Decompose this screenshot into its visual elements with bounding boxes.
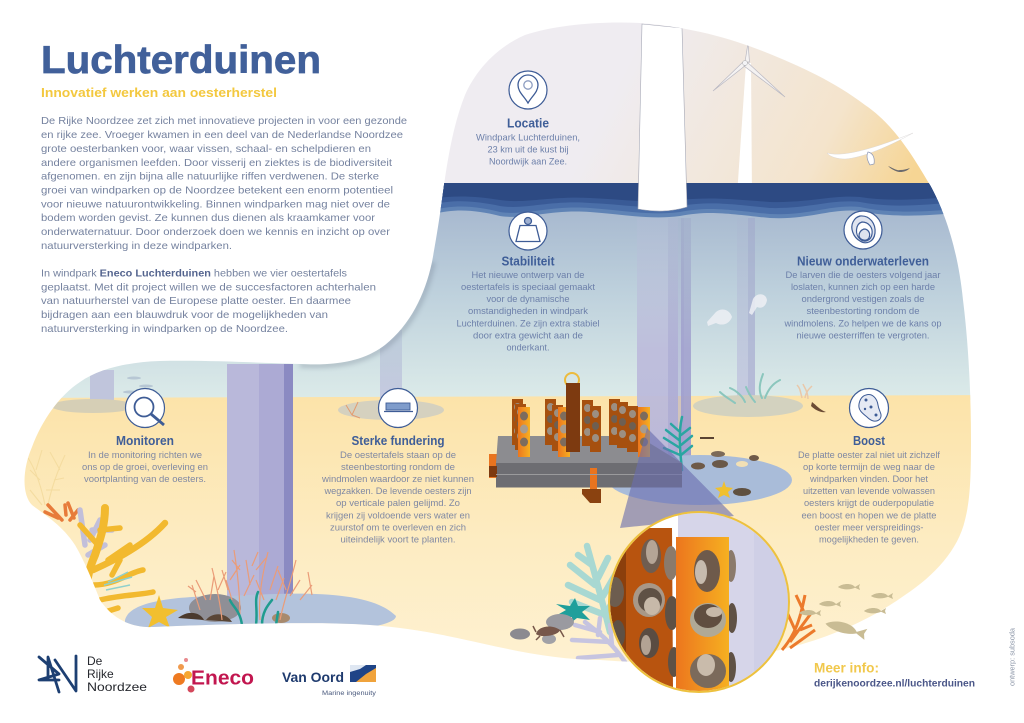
teal starfish [556,598,590,621]
text: mogelijkheden te geven. [819,534,919,544]
logo balls [173,658,194,692]
text: oestertafels is speciaal gemaakt [461,281,595,292]
text: steenbestorting rondom de [341,461,455,472]
text: 23 km uit de kust bij [488,144,568,154]
second paragraph: natuurversterking in windparken op de Noordzee. [41,323,288,335]
logo: De Rijke Noordzee: Rijke [87,667,114,681]
green seaweed [230,592,278,625]
bottom left rock bed [125,594,396,628]
far left rock bed [53,399,126,413]
intro paragraph: natuurversterking in deze windparken. [41,240,232,252]
text: voor de dynamische [486,293,570,304]
text: De platte oester zal niet uit zichzelf [798,449,940,460]
text: Windpark Luchterduinen, [476,132,580,142]
panel: Stabiliteit [456,212,600,352]
icon: foundation [378,388,418,428]
orange coral right [782,595,815,650]
text: krijgen zij voldoende vers water en [326,510,470,520]
text [476,132,580,166]
oyster right 2 [690,603,726,637]
logo wordmark: De [87,654,103,668]
middle rock bed with coral [338,400,444,420]
text: door extra gewicht aan de [473,330,583,340]
orange coral left [45,503,78,520]
oyster right 1 [694,550,720,592]
panel: Sterke fundering [321,388,474,544]
intro paragraph: De Rijke Noordzee zet zich met innovatieve projecten in voor een gezonde [41,115,407,127]
teal frond [664,417,692,470]
intro paragraph: en rijke zee. Vroeger kwamen in een deel van de Nederlandse Noordzee [41,129,403,141]
icon: oyster [850,388,888,428]
logo mark [39,656,76,692]
fish school [799,584,893,640]
text: nieuwe oesterriffen te vergroten. [796,330,930,340]
main pillar underwater [637,218,691,478]
yellow starfish [142,595,178,628]
table front [496,463,682,488]
lavender leaves [80,510,112,555]
text: windparken vinden. Door het [809,473,928,484]
text [82,449,208,484]
logo: Van Oord [282,665,377,697]
heading: Locatie [507,116,549,130]
icon: magnifier [126,388,164,428]
text: oester meer verspreidings- [814,522,924,532]
intro paragraph: voor nieuwe natuurontwikkeling. Binnen windparken mag niet over de [41,198,390,210]
far pillars [90,218,755,402]
icon: weight [509,212,547,250]
text: oesters krijgt de ouderpopulatie [804,497,934,508]
text [798,449,940,544]
intro paragraph: andere organismen leefden. Door visserij en ziektes is de biodiversiteit [41,157,392,169]
logo tagline: Marine ingenuity [322,690,377,697]
text [784,269,942,340]
seagulls [827,133,913,172]
panel: Locatie [476,71,580,166]
school of fish background [123,376,153,394]
orange column [676,537,729,697]
text: Noordwijk aan Zee. [489,156,567,166]
table top [496,436,682,463]
text: ons op de groei, overleving en [82,461,208,472]
intro paragraph: bodem worden gevist. Ze kunnen dus dienen als kraamkamer voor [41,212,376,224]
text [456,269,600,352]
rear oysters [664,546,676,580]
text: In de monitoring richten we [88,449,202,460]
logo: De Rijke Noordzee: Noordzee [87,680,147,694]
far wind turbine [712,46,786,183]
jellyfish [707,294,767,326]
main tower above water [638,24,687,211]
text: uitzetten van levende volwassen [803,485,935,496]
pale teal frond [568,546,622,632]
table feet back [489,454,497,478]
text: windmolen waardoor ze niet kunnen [321,473,474,484]
sea surface waves [430,183,990,218]
text: Het nieuwe ontwerp van de [472,269,584,280]
second paragraph [41,268,376,335]
subtitle: Innovatief werken aan oesterherstel [41,85,277,100]
starfish [715,481,733,498]
front foot [489,466,682,503]
second paragraph: In windpark Eneco Luchterduinen hebben we vier oestertafels [41,268,347,280]
oyster table [489,373,682,503]
rock bed around main pillar [608,455,792,505]
logo wordmark: Van Oord [282,669,344,685]
text: steenbestorting rondom de [806,305,920,316]
intro paragraph: grote oesterbanken voor, waar vissen, schaal- en schelpdieren en [41,143,371,155]
pale coral left [28,450,65,505]
oyster right 3 [690,654,726,688]
oysters on rock bed [691,438,759,496]
far left dark column [610,548,628,656]
second paragraph: geplaatst. Met dit project willen we de succesfactoren achterhalen [41,282,376,294]
text: loslaten, kunnen zich op een harde [791,281,935,292]
text: omstandigheden in windpark [468,305,588,316]
circle ring [609,512,789,692]
yellow coral [80,508,165,622]
panel: Monitoren [82,388,208,484]
lavender frond [572,618,625,662]
panel: Boost [798,388,940,544]
text: ondergrond vestigen zoals de [802,293,924,304]
text: uiteindelijk voort te planten. [340,534,456,544]
magnified oyster column circle [608,511,790,693]
logo wordmark: Eneco [191,668,254,690]
intro paragraph: groei van windparken op de Noordzee betekent een enorm potentieel [41,184,393,196]
text: De larven die de oesters volgend jaar [786,269,940,280]
left foreground pillar [227,364,293,609]
sandy sea floor [24,395,971,662]
heading: Stabiliteit [502,254,555,268]
icon: location pin [509,71,547,109]
right rock bed with seaweed [693,374,803,417]
title: Luchterduinen [41,39,321,82]
second paragraph: bijdragen aan een blauwdruk voor de mogelijkheden van [41,309,328,321]
text: onderkant. [506,342,550,352]
shadow of white panel [300,262,433,365]
heading: Nieuw onderwaterleven [797,254,929,268]
sky [444,22,929,183]
intro paragraph: afgenomen. en zijn bijna alle natuurlijke riffen verdwenen. De sterke [41,170,379,182]
text: windmolens. Zo helpen we de kans op [784,318,942,328]
text [321,449,474,544]
oyster left 2 [633,583,665,617]
icon: shell [844,211,882,249]
columns with oysters [512,399,650,457]
central handle post [565,373,580,452]
text: voortplanting van de oesters. [84,473,206,484]
second paragraph: van natuurherstel van de Europese platte oester. En daarmee [41,295,351,307]
intro paragraph: onderwaternatuur. Door onderzoek doen we kennis en inzicht op over [41,226,391,238]
text: De oestertafels staan op de [340,449,456,460]
text: op korte termijn de weg naar de [803,461,935,472]
underwater [60,200,970,400]
oyster left 1 [641,539,661,573]
logo flag [350,665,376,682]
text: wegzakken. De levende oesters zijn [324,485,472,496]
heading: Monitoren [116,434,174,448]
heading: Boost [853,434,886,448]
text: zuurstof om te overleven en zich [330,522,466,532]
text: Luchterduinen. Ze zijn extra stabiel [456,318,600,328]
logo: Eneco [173,658,254,692]
logo: De Rijke Noordzee [39,654,147,694]
design credit: ontwerp: subsoda [1010,628,1016,686]
rocks and crab [510,614,574,644]
coral and lobster right [797,384,826,412]
more info heading: Meer info: [814,660,879,676]
more info url: derijkenoordzee.nl/luchterduinen [814,678,975,690]
text: een boost en hopen we de platte [802,510,936,520]
salmon branching coral [188,550,312,620]
text: op verticale palen gelijmd. Zo [336,497,460,508]
panel: Nieuw onderwaterleven [784,211,942,340]
heading: Sterke fundering [352,434,444,448]
oyster left 3 [639,628,659,658]
lavender background [678,513,765,686]
teal tuft [104,572,132,590]
magnification beam [620,428,734,528]
intro paragraph [41,115,407,252]
brown column [626,528,673,690]
